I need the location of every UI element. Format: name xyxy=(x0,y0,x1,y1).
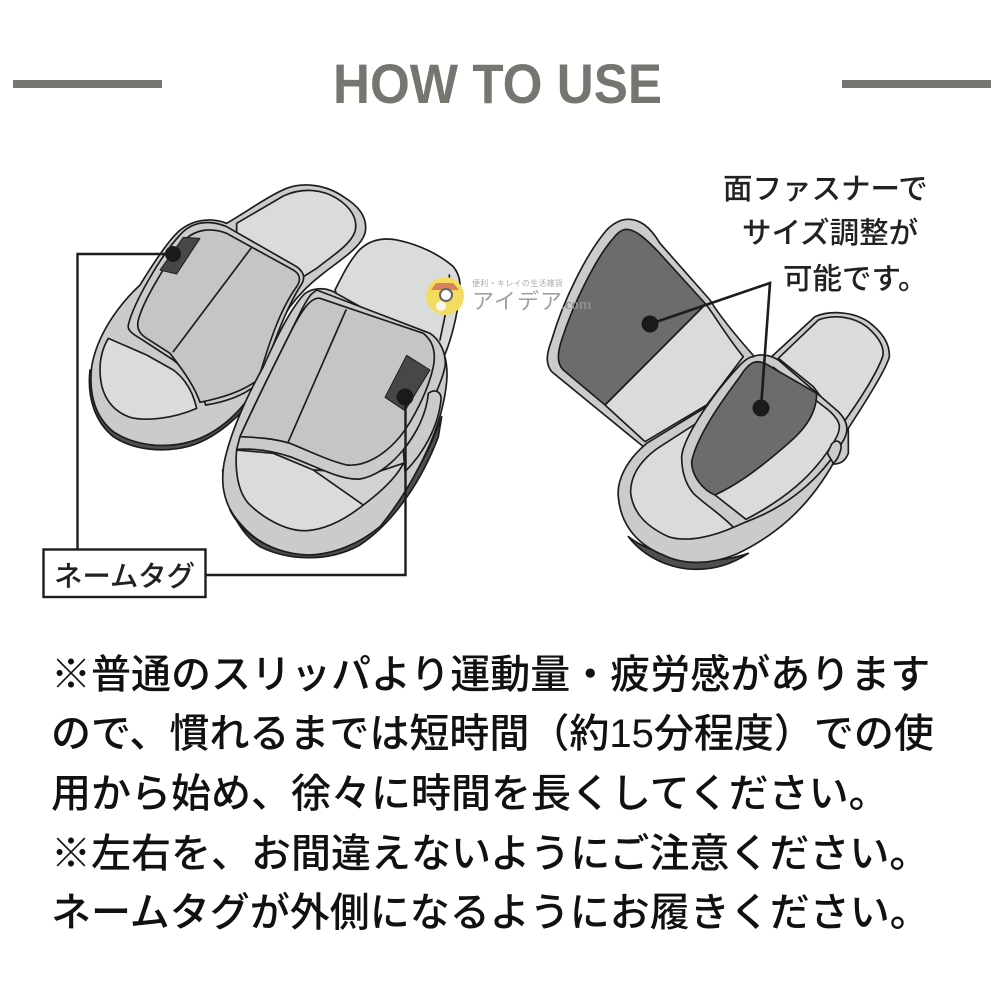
callout: fastener size adjustment: 可能です。 xyxy=(783,263,928,296)
dot: front name tag xyxy=(396,388,414,406)
dot: flap fastener xyxy=(642,316,658,332)
label: name tag: ネームタグ xyxy=(54,561,195,593)
toe: rear xyxy=(100,338,197,419)
base xyxy=(618,393,841,562)
toe xyxy=(631,393,833,539)
watermark: logo: 便利・キレイの生活雑貨 xyxy=(472,278,563,288)
leader lines: fastener xyxy=(650,283,770,408)
dot: strap fastener xyxy=(752,400,770,416)
notes text block: ※普通のスリッパより運動量・疲労感があります xyxy=(51,653,930,697)
right slipper xyxy=(547,219,889,569)
notes text block: ※左右を、お間違えないようにご注意ください。 xyxy=(51,832,929,876)
slipper: front xyxy=(223,417,442,558)
dot: rear name tag xyxy=(165,246,181,262)
strap: dark fastener xyxy=(692,362,817,495)
side panel: front xyxy=(313,463,403,505)
hook panel: rear xyxy=(138,230,299,402)
callout: fastener size adjustment: サイズ調整が xyxy=(742,217,918,250)
flap: light lining xyxy=(605,304,743,442)
callout: fastener size adjustment xyxy=(723,173,928,296)
illustration: slippers with name tags xyxy=(42,173,928,598)
strap xyxy=(682,355,847,527)
strap: lining xyxy=(715,367,839,519)
watermark: logo xyxy=(426,277,592,315)
heading rule: right xyxy=(842,80,991,88)
leader lines: name tag xyxy=(78,254,406,575)
label: name tag xyxy=(44,550,206,597)
notes text block: ので、慣れるまでは短時間（約15分程度）での使 xyxy=(51,712,934,756)
left pair xyxy=(89,185,460,558)
flap: outer xyxy=(547,219,755,447)
watermark: logo: アイデア xyxy=(472,289,562,314)
hook panel: front xyxy=(240,298,434,465)
slipper: rear sole xyxy=(89,370,258,450)
callout: fastener size adjustment: 面ファスナーで xyxy=(723,173,928,206)
notes text block: ネームタグが外側になるようにお履きください。 xyxy=(51,891,930,935)
sole xyxy=(628,537,748,569)
side loop: front xyxy=(403,391,441,472)
name tag: rear xyxy=(160,237,200,274)
side tab xyxy=(827,441,841,463)
heading rule: left xyxy=(13,80,162,88)
notes text block xyxy=(51,653,934,935)
name tag: front xyxy=(385,355,430,411)
flap: dark fastener xyxy=(558,229,706,405)
notes text block: 用から始め、徐々に時間を長くしてください。 xyxy=(51,772,889,816)
strap: rear xyxy=(128,223,304,405)
heel xyxy=(772,313,889,464)
watermark: logo: .com xyxy=(561,297,592,313)
heel insole: rear xyxy=(237,190,356,277)
toe: front xyxy=(236,450,363,531)
strap: front xyxy=(237,290,445,479)
